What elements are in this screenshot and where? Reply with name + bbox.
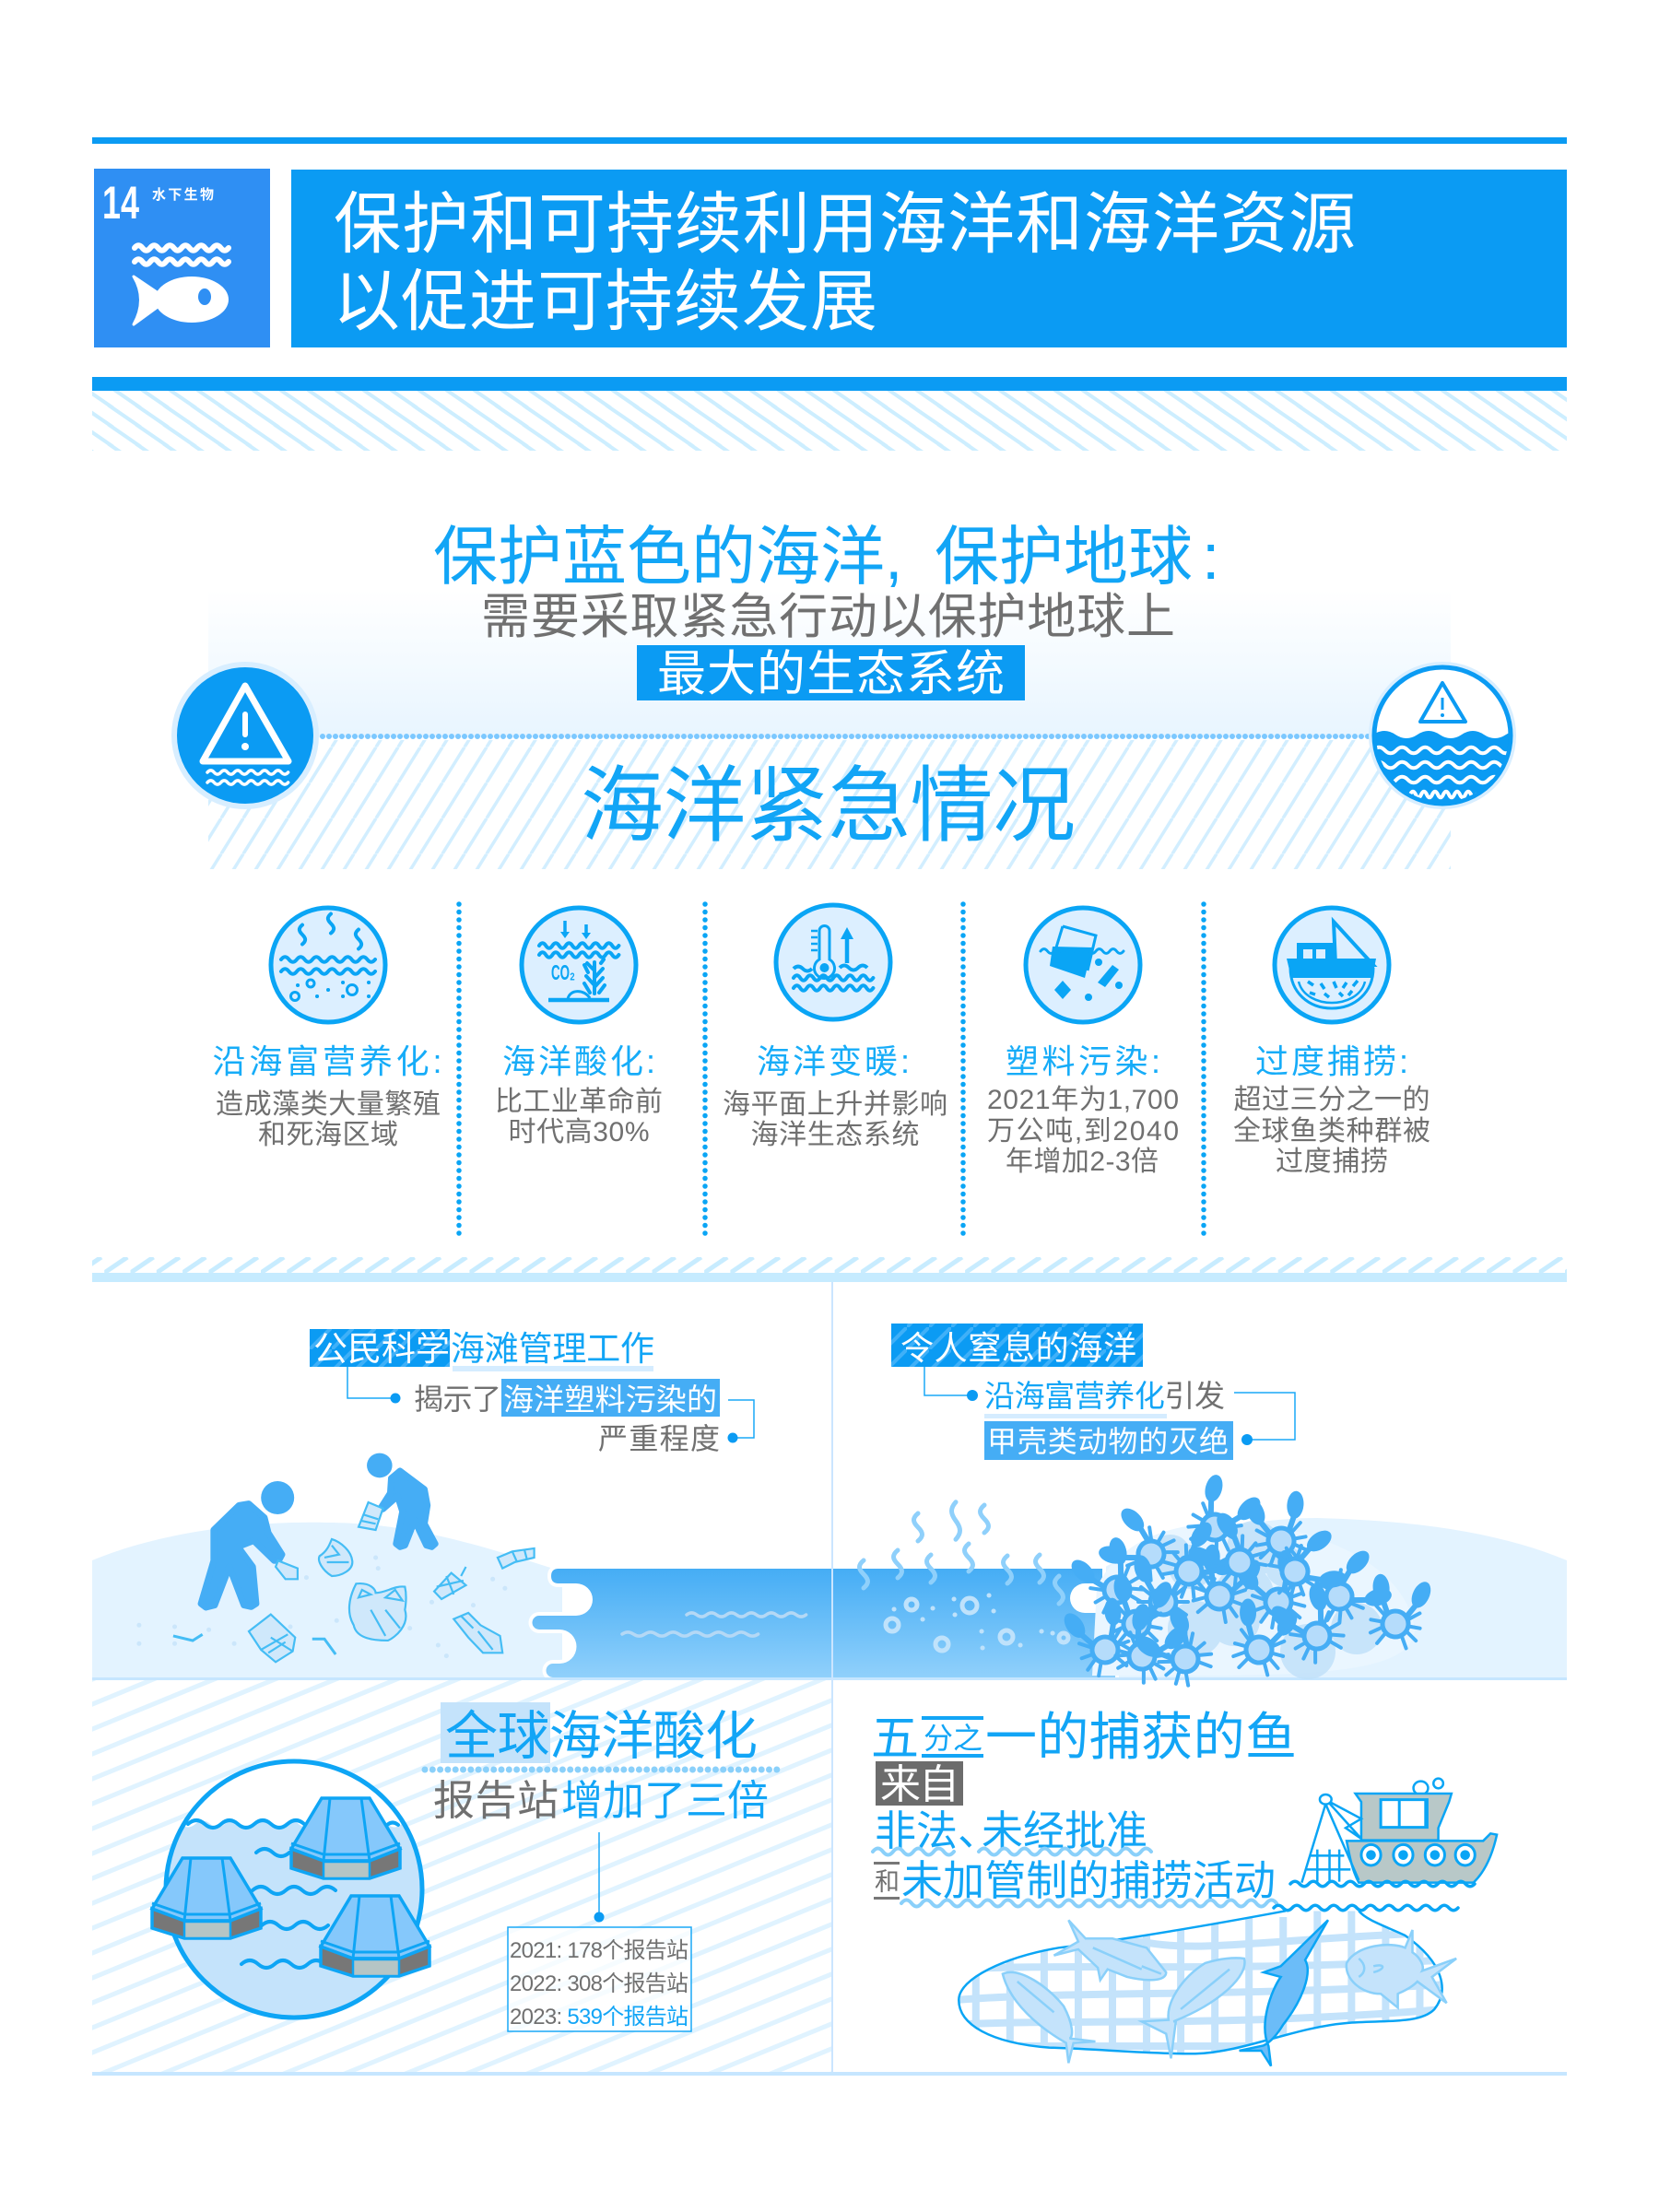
line: unregulated fishing: 未加管制的捕捞活动 [901, 1857, 1276, 1904]
icon: acidification [522, 908, 636, 1022]
subheading: 需要采取紧急行动以保护地球上 [481, 590, 1175, 644]
panel: plastic pollution: 万公吨,到2040 [987, 1116, 1179, 1147]
connector [1234, 1393, 1295, 1445]
subheading: 报告站 [433, 1777, 559, 1824]
illustration: fishing boat [1301, 1779, 1497, 1883]
label: from: 来自 [880, 1762, 959, 1807]
highlighted subheading: 最大的生态系统 [657, 647, 1005, 701]
panel: suffocating ocean: 沿海富营养化引发 [984, 1379, 1225, 1413]
panel: ocean warming: 海洋变暖: [757, 1042, 910, 1080]
data box: 2023: 539个报告站 [510, 2005, 688, 2030]
heading: 保护地球 [935, 521, 1193, 593]
dotted column dividers [459, 904, 1204, 1234]
infographic canvas [92, 137, 1567, 2076]
label: beach management: 海滩管理工作 [451, 1330, 654, 1368]
wave underline [873, 1849, 1277, 1906]
connector [728, 1400, 754, 1443]
connector [347, 1367, 400, 1403]
second rule [92, 377, 1567, 391]
panel: illegal fishing [871, 1708, 1497, 2066]
illustration: beach and water [92, 1518, 1567, 1680]
panel: citizen science beach cleanup: 揭示了 [414, 1382, 501, 1416]
panel: ocean warming: 海平面上升并影响 [723, 1089, 947, 1120]
dotted line [323, 734, 1373, 739]
label: citizen science: 公民科学 [313, 1330, 450, 1368]
trash items [249, 1502, 535, 1662]
panel: overfishing: 超过三分之一的 [1233, 1085, 1430, 1115]
panel: plastic pollution: 2021年为1,700 [987, 1085, 1179, 1115]
icon: eutrophication [271, 908, 385, 1022]
panel: overfishing: 过度捕捞 [1276, 1147, 1388, 1177]
small word: and: 和 [875, 1868, 900, 1896]
SDG 14 badge [94, 169, 270, 347]
connector [924, 1367, 978, 1401]
line: illegal unreported: 未经批准 [982, 1807, 1147, 1854]
bottom rule [92, 2072, 1567, 2076]
illustration: monitoring buoys [152, 1761, 431, 2028]
panel: coastal eutrophication: 和死海区域 [258, 1120, 398, 1150]
icon: waves and fish [134, 245, 229, 324]
icon: acidification: CO₂ [551, 960, 575, 984]
panel: ocean warming: 海洋生态系统 [750, 1120, 920, 1150]
icon: warming [776, 905, 890, 1019]
icon: fishing boat [1275, 908, 1389, 1022]
top rule [92, 137, 1567, 144]
illustration: steam and bubbles [859, 1502, 1068, 1651]
panel: citizen science beach cleanup: 严重程度 [598, 1422, 720, 1455]
panel: ocean warming [723, 905, 947, 1150]
label: suffocating ocean: 令人窒息的海洋 [900, 1329, 1136, 1367]
panel: overfishing: 过度捕捞: [1255, 1042, 1408, 1080]
panel: global ocean acidification: 增加了三倍 [561, 1777, 769, 1824]
data box [508, 1927, 691, 2031]
panel: suffocating ocean [859, 1324, 1435, 1697]
line: illegal unreported: 非法、 [875, 1807, 999, 1854]
highlighted text: 甲壳类动物的灭绝 [987, 1425, 1229, 1458]
icon: warning circle [171, 662, 319, 809]
heading: 全球海洋酸化 [445, 1707, 758, 1766]
panel: global ocean acidification [92, 1680, 831, 2072]
illustration: crab cluster [1058, 1469, 1435, 1697]
goal name: 水下生物 [152, 186, 214, 203]
data box: 2022: 308个报告站 [510, 1971, 688, 1996]
panel: coastal eutrophication: 造成藻类大量繁殖 [216, 1089, 441, 1120]
title banner: 保护和可持续利用海洋和海洋资源 [334, 187, 1356, 262]
panel: ocean acidification: 海洋酸化: [502, 1042, 655, 1080]
panel: citizen science beach cleanup [92, 1329, 1567, 1680]
panel: plastic pollution: 塑料污染: [1006, 1042, 1160, 1080]
panel: ocean acidification [495, 908, 663, 1147]
vertical divider [831, 1282, 833, 2075]
illustration: people collecting trash [139, 1453, 535, 1662]
connector [594, 1832, 605, 1923]
section band [92, 1257, 1567, 1282]
heading: : [1202, 521, 1219, 593]
large heading: 海洋紧急情况 [581, 760, 1076, 853]
heading: one fifth: 分之 [924, 1722, 982, 1755]
panel: overfishing [1233, 908, 1430, 1177]
panel: plastic pollution: 年增加2-3倍 [1006, 1147, 1159, 1177]
goal number: 14 [102, 177, 139, 229]
panel: plastic pollution [987, 908, 1179, 1177]
heading: one fifth: 五 [871, 1712, 919, 1766]
panel: ocean acidification: 比工业革命前 [495, 1087, 663, 1117]
heading: one fifth: 一的捕获的鱼 [985, 1708, 1297, 1766]
panel: coastal eutrophication: 沿海富营养化: [212, 1042, 442, 1080]
icon: warning over water [1369, 662, 1528, 811]
panel: ocean acidification: 时代高30% [509, 1117, 649, 1147]
highlighted text: 海洋塑料污染的 [503, 1382, 717, 1417]
panel: overfishing: 全球鱼类种群被 [1233, 1116, 1430, 1147]
title banner [291, 170, 1567, 347]
waterlines [1274, 1881, 1475, 1911]
panel: ocean emergency header [171, 521, 1528, 869]
icon: plastic [1026, 908, 1140, 1022]
title banner: 以促进可持续发展 [333, 265, 877, 339]
panel: coastal eutrophication [212, 908, 442, 1150]
data box: 2021: 178个报告站 [510, 1938, 688, 1963]
heading: 保护蓝色的海洋, [433, 521, 902, 593]
illustration: net with fish [957, 1911, 1456, 2066]
